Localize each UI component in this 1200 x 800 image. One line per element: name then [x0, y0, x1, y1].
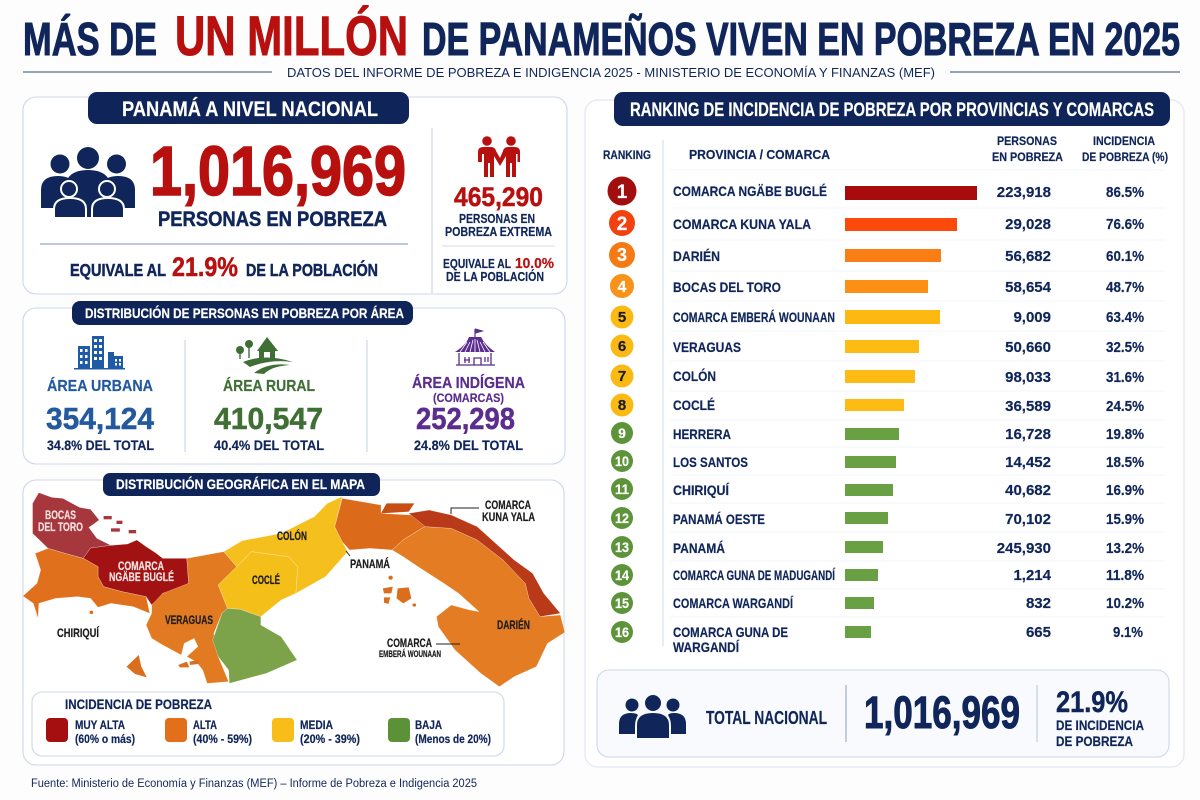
panel: Panamá a nivel nacional: [23, 92, 567, 294]
region: Panamá: [335, 498, 431, 550]
row 16: COMARCA GUNA DE: [673, 624, 788, 640]
heading: distribución: DISTRIBUCIÓN DE PERSONAS EN POBREZA POR ÁREA: [85, 304, 404, 321]
stat: área rural: [214, 376, 324, 453]
row 6: 32.5%: [1106, 339, 1144, 356]
row 9: [611, 422, 1144, 444]
row 16: [611, 621, 1143, 655]
stat: área indígena: 24.8% DEL TOTAL: [414, 437, 523, 453]
stat: pobreza extrema: 465,290: [454, 182, 543, 212]
row 13: PANAMÁ: [673, 540, 725, 556]
region: Comarca Kuna Yala: [409, 510, 560, 617]
row 10: LOS SANTOS: [673, 454, 748, 470]
row 11: 16.9%: [1106, 482, 1144, 499]
row 12: PANAMÁ OESTE: [673, 511, 765, 527]
row 15: [611, 592, 1144, 614]
label: personas en pobreza: PERSONAS EN POBREZA: [158, 208, 387, 231]
total incidence: 21.9%: [1056, 686, 1128, 719]
row 4: 58,654: [1005, 279, 1052, 296]
text: equivale al 21.9%: [70, 252, 378, 282]
callout lines: [346, 508, 479, 644]
map labels: PANAMÁ: [350, 558, 390, 571]
legend item: baja: BAJA: [415, 720, 442, 732]
table header: EN POBREZA: [992, 150, 1063, 164]
islands: Bocas: [104, 516, 136, 533]
row 7: 31.6%: [1106, 369, 1144, 386]
icon: indigenous hut: [455, 329, 495, 365]
legend item: baja: (Menos de 20%): [415, 734, 491, 746]
row 8: 24.5%: [1106, 398, 1144, 415]
row 16: WARGANDÍ: [673, 639, 740, 655]
text: equivale al 21.9%: EQUIVALE AL: [70, 260, 166, 280]
stat: área urbana: 354,124: [46, 401, 155, 436]
stat: área rural: 40.4% DEL TOTAL: [214, 437, 324, 453]
row 11: CHIRIQUÍ: [673, 482, 730, 498]
row 7: [610, 364, 1144, 388]
stat: área urbana: 34.8% DEL TOTAL: [47, 437, 154, 453]
row 5: [610, 306, 1144, 328]
row 2: [609, 210, 1144, 236]
heading: nacional: PANAMÁ A NIVEL NACIONAL: [122, 98, 378, 121]
row 4: 4: [618, 279, 627, 296]
stat: área urbana: ÁREA URBANA: [47, 376, 153, 395]
row 14: 14: [615, 567, 629, 583]
source: Fuente: Ministerio de Economía y Finanzas (MEF) – Informe de Pobreza e Indigencia 2025: [31, 778, 477, 790]
stat: área urbana: [46, 376, 155, 453]
subtitle: DATOS DEL INFORME DE POBREZA E INDIGENCIA 2025 - MINISTERIO DE ECONOMÍA Y FINANZAS (MEF): [287, 65, 935, 80]
region: Colón: [224, 497, 348, 593]
map labels: KUNA YALA: [482, 512, 535, 524]
row 3: 60.1%: [1106, 248, 1144, 265]
stat: pobreza extrema: [445, 182, 552, 239]
row 12: [611, 507, 1144, 529]
row 1: COMARCA NGÄBE BUGLÉ: [673, 183, 827, 199]
stat: pobreza extrema: POBREZA EXTREMA: [445, 225, 552, 239]
heading: mapa: [103, 473, 380, 496]
row 14: [611, 564, 1144, 586]
total incidence: DE INCIDENCIA: [1056, 718, 1144, 733]
row 9: HERRERA: [673, 426, 731, 442]
row 5: 63.4%: [1106, 309, 1144, 326]
map labels: EMBERÁ WOUNAAN: [379, 649, 441, 660]
heading: nacional: [88, 92, 409, 124]
row 2: 76.6%: [1106, 216, 1144, 233]
table header: PERSONAS: [997, 134, 1057, 148]
row 5: 9,009: [1013, 309, 1051, 326]
stat: área indígena: 252,298: [416, 401, 515, 436]
row 6: 6: [618, 338, 626, 355]
legend item: alta: ALTA: [193, 720, 217, 732]
icon: group of people: [41, 147, 135, 218]
row 8: 8: [618, 397, 626, 414]
table header: PROVINCIA / COMARCA: [689, 147, 831, 162]
total number: 1,016,969: [864, 687, 1020, 738]
text: equivale al 10.0%: EQUIVALE AL: [443, 257, 511, 271]
text: equivale al 10.0%: [443, 255, 554, 284]
map of Panama: [23, 493, 565, 687]
row 16: 9.1%: [1113, 624, 1143, 641]
map labels: NGÄBE BUGLÉ: [109, 571, 174, 584]
map labels: COMARCA: [387, 638, 432, 650]
icon: two people holding hands: [478, 136, 520, 177]
map labels: VERAGUAS: [165, 615, 213, 627]
stat: área indígena: ÁREA INDÍGENA: [412, 373, 525, 392]
row 6: [610, 334, 1144, 358]
row 1: 86.5%: [1106, 184, 1144, 201]
row 7: 98,033: [1005, 369, 1051, 386]
row 12: 70,102: [1005, 511, 1051, 528]
region: Chiriquí: [23, 548, 150, 618]
legend item: baja: [388, 718, 491, 746]
row 1: 1: [617, 182, 628, 203]
map labels: DARIÉN: [497, 619, 530, 632]
region: Bocas del Toro: [33, 493, 111, 558]
text: equivale al 21.9%: DE LA POBLACIÓN: [246, 259, 378, 280]
legend item: media: [272, 718, 360, 746]
row 4: [610, 274, 1144, 298]
heading: mapa: DISTRIBUCIÓN GEOGRÁFICA EN EL MAPA: [116, 475, 365, 492]
title: UN MILLÓN: [175, 4, 408, 67]
heading: ranking: [614, 92, 1170, 126]
row 3: 56,682: [1005, 248, 1051, 265]
row 5: 5: [618, 309, 626, 326]
icon: three people: [619, 695, 686, 738]
legend: [32, 692, 504, 756]
row 11: [611, 478, 1144, 500]
row 6: VERAGUAS: [673, 339, 741, 355]
map labels: COMARCA: [118, 561, 164, 573]
text: equivale al 10.0%: 10.0%: [515, 255, 554, 272]
legend item: media: (20% - 39%): [300, 734, 360, 746]
stat: área rural: 410,547: [214, 401, 323, 436]
map labels: COLÓN: [277, 530, 307, 543]
text: equivale al 10.0%: DE LA POBLACIÓN: [446, 269, 544, 284]
map labels: COMARCA: [485, 500, 531, 512]
panel: ranking: [585, 92, 1184, 767]
table header: [603, 134, 1168, 164]
row 10: 18.5%: [1106, 454, 1144, 471]
panel: distribución geográfica: [23, 473, 565, 765]
legend item: muy alta: [46, 718, 135, 746]
region: Darién: [392, 527, 565, 687]
islands: [90, 503, 416, 677]
total nacional box: [597, 670, 1169, 757]
heading: distribución: [72, 301, 413, 325]
row 15: COMARCA WARGANDÍ: [673, 595, 794, 611]
region: Comarca Ngäbe Buglé: [83, 540, 189, 605]
row 2: COMARCA KUNA YALA: [673, 216, 811, 232]
row 11: 11: [615, 481, 629, 497]
row 9: 9: [618, 425, 626, 441]
map labels: BOCAS: [45, 510, 76, 522]
title: MÁS DE: [23, 13, 157, 65]
row 3: [609, 242, 1144, 268]
row 14: COMARCA GUNA DE MADUGANDÍ: [673, 568, 836, 583]
row 11: 40,682: [1005, 482, 1051, 499]
legend item: alta: [165, 718, 252, 746]
legend item: muy alta: (60% o más): [75, 734, 135, 746]
legend: INCIDENCIA DE POBREZA: [65, 697, 212, 712]
row 8: COCLÉ: [673, 397, 715, 413]
legend item: muy alta: MUY ALTA: [75, 720, 125, 732]
total incidence: [1056, 686, 1144, 749]
table header: RANKING: [603, 148, 651, 162]
map labels: CHIRIQUÍ: [57, 627, 100, 640]
icon: rural house and fields: [236, 337, 293, 374]
row 9: 16,728: [1005, 426, 1051, 443]
map labels: COCLÉ: [252, 574, 280, 587]
row 13: 245,930: [997, 540, 1051, 557]
stat: pobreza extrema: PERSONAS EN: [459, 212, 535, 226]
label: total nacional: TOTAL NACIONAL: [706, 708, 827, 728]
row 6: 50,660: [1005, 339, 1051, 356]
region: Coclé: [218, 552, 298, 617]
row 13: [611, 536, 1144, 558]
row 14: 1,214: [1013, 567, 1052, 584]
row 7: COLÓN: [673, 367, 716, 384]
row 12: 12: [615, 510, 629, 526]
row 5: COMARCA EMBERÁ WOUNAAN: [673, 309, 835, 325]
panel: distribución por área: [23, 301, 565, 464]
row 16: 665: [1026, 624, 1051, 641]
stat: área indígena: [412, 373, 525, 453]
row 16: 16: [615, 624, 629, 640]
row 10: 10: [615, 453, 629, 469]
text: equivale al 21.9%: 21.9%: [172, 252, 238, 282]
region: Veraguas: [146, 552, 237, 683]
icon: city buildings: [74, 336, 125, 370]
row 7: 7: [618, 368, 626, 385]
row 15: 10.2%: [1106, 595, 1144, 612]
row 13: 13.2%: [1106, 540, 1144, 557]
row 14: 11.8%: [1106, 567, 1144, 584]
row 2: 29,028: [1005, 216, 1051, 233]
row 9: 19.8%: [1106, 426, 1144, 443]
row 1: 223,918: [997, 184, 1051, 201]
total incidence: DE POBREZA: [1056, 734, 1133, 749]
row 3: 3: [617, 245, 627, 265]
title: [23, 4, 1180, 67]
legend item: alta: (40% - 59%): [193, 734, 252, 746]
row 15: 15: [615, 595, 629, 611]
row 1: [608, 176, 1144, 206]
row 10: 14,452: [1005, 454, 1051, 471]
row 8: 36,589: [1005, 398, 1051, 415]
big number: 1,016,969: [150, 132, 406, 210]
row 3: DARIÉN: [673, 248, 720, 264]
table header: DE POBREZA (%): [1082, 150, 1168, 164]
stat: área indígena: (COMARCAS): [433, 391, 504, 405]
map labels: DEL TORO: [38, 522, 83, 534]
legend item: media: MEDIA: [300, 720, 333, 732]
row 4: 48.7%: [1106, 279, 1144, 296]
row 4: BOCAS DEL TORO: [673, 279, 781, 295]
map labels: [38, 500, 535, 660]
row 2: 2: [617, 214, 627, 235]
row 13: 13: [615, 539, 629, 555]
table header: INCIDENCIA: [1093, 134, 1155, 148]
row 10: [611, 450, 1144, 472]
row 15: 832: [1026, 595, 1051, 612]
stat: área rural: ÁREA RURAL: [223, 376, 315, 395]
region: Herrera y Los Santos: [213, 608, 297, 683]
row 12: 15.9%: [1106, 511, 1144, 528]
row 8: [610, 394, 1144, 416]
